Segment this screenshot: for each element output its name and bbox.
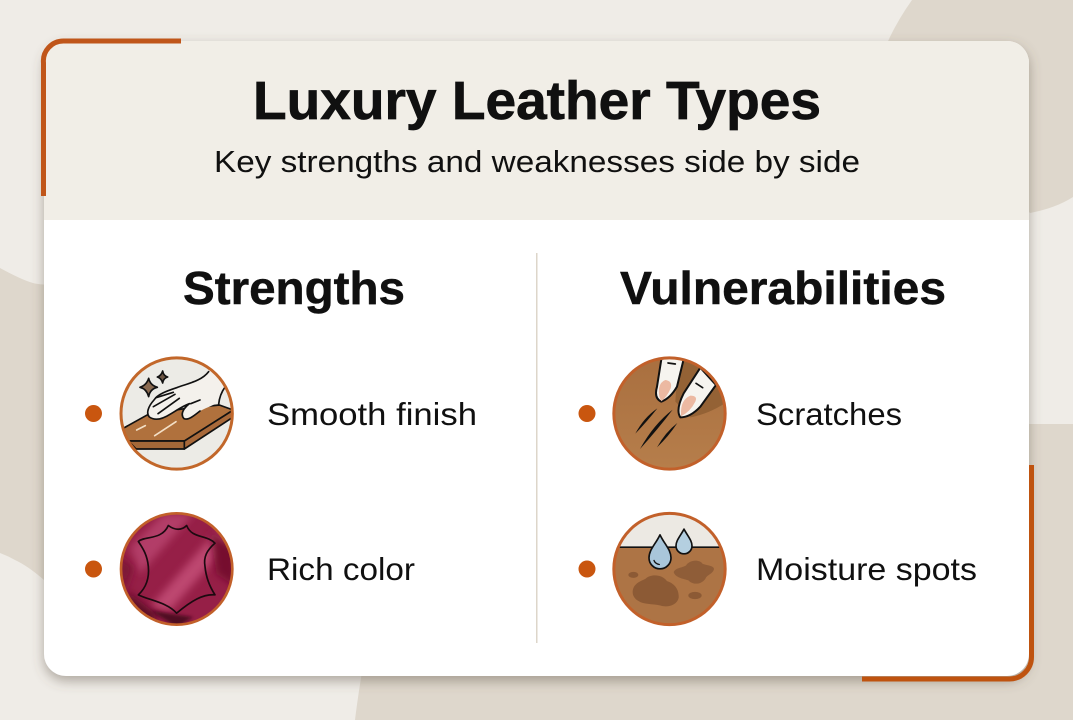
- bullet: [578, 560, 596, 578]
- label: Scratches: [756, 396, 902, 432]
- scratch marks: [635, 408, 657, 434]
- background blob: left: [0, 268, 60, 590]
- subtitle: Key strengths and weaknesses side by side: [214, 144, 860, 179]
- icon: water drops and stains: [612, 513, 727, 627]
- corner accent: top left: [43, 41, 181, 196]
- item: smooth finish: [85, 355, 477, 469]
- item: scratches: [578, 355, 902, 469]
- icon: fingernails scratching leather: [614, 355, 732, 469]
- background blob: top right: [880, 0, 1073, 213]
- corner accent: bottom right: [862, 465, 1032, 679]
- label: Rich color: [267, 551, 415, 587]
- label: Moisture spots: [756, 551, 977, 587]
- column divider: [536, 253, 538, 643]
- bullet: [85, 560, 102, 578]
- header band: [44, 41, 1029, 220]
- heading: strengths: Strengths: [183, 262, 405, 314]
- label: Smooth finish: [267, 396, 477, 432]
- item: moisture spots: [578, 513, 977, 627]
- heading: vulnerabilities: Vulnerabilities: [620, 262, 946, 314]
- bullet: [85, 405, 102, 422]
- item: rich color: [85, 513, 415, 630]
- icon: burgundy leather hide: [117, 513, 237, 630]
- bullet: [578, 405, 596, 422]
- title: Luxury Leather Types: [253, 71, 821, 131]
- background blob: bottom right: [355, 424, 1073, 720]
- icon: hand on smooth leather: [118, 355, 237, 469]
